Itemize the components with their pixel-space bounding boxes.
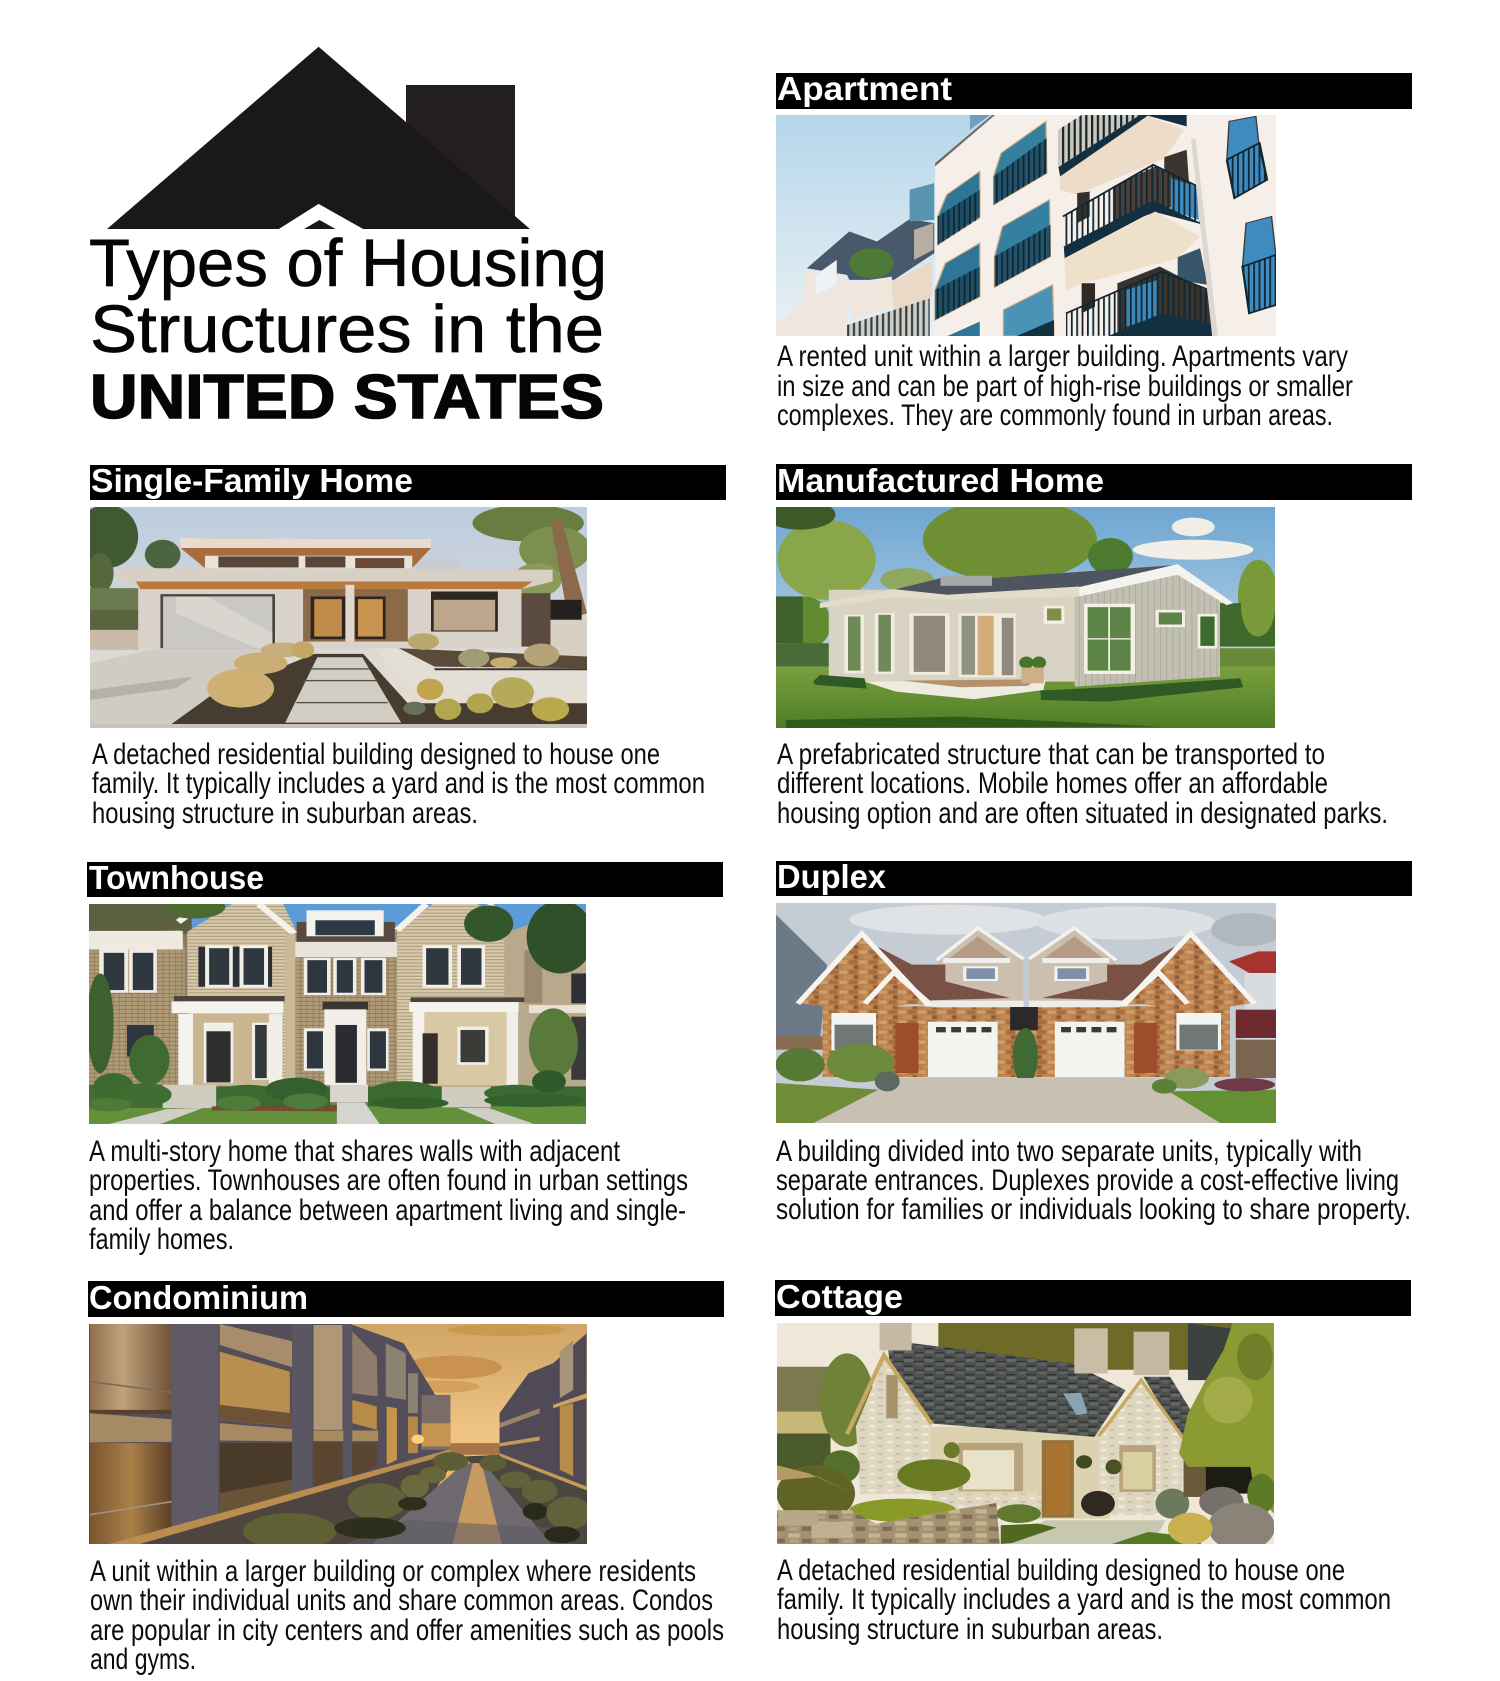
description: apartment: complexes. They are commonly found in urban areas. (777, 399, 1333, 432)
panel: single-family home (76, 462, 726, 830)
description: cottage: housing structure in suburban areas. (777, 1613, 1163, 1646)
photo: brick duplex (776, 903, 1276, 1123)
description: single-family home (92, 738, 705, 830)
description: condominium: are popular in city centers and offer amenities such as pools (90, 1614, 724, 1647)
photo: modern single-family home (90, 507, 587, 728)
heading bar: Condominium (88, 1279, 724, 1317)
title block (89, 47, 607, 432)
description: townhouse: and offer a balance between apartment living and single- (89, 1194, 686, 1227)
description: apartment: A rented unit within a larger building. Apartments vary (777, 340, 1348, 373)
description: condominium: own their individual units and share common areas. Condos (90, 1584, 713, 1617)
heading bar: Single-Family Home (90, 462, 726, 500)
photo: row of townhouses (89, 904, 586, 1124)
photo: apartment building (776, 115, 1276, 336)
photo: stone cottage (777, 1323, 1274, 1544)
panel: townhouse (87, 859, 723, 1256)
heading bar: Townhouse (87, 859, 723, 897)
right windows (1227, 116, 1276, 313)
title: Structures in the: Structures in the (90, 292, 604, 367)
panel: condominium (88, 1279, 724, 1676)
description: townhouse: family homes. (89, 1223, 234, 1256)
photo: manufactured home (776, 507, 1275, 728)
panel: duplex (776, 858, 1412, 1226)
balconies (1058, 115, 1218, 336)
description: manufactured home: different locations. Mobile homes offer an affordable (777, 767, 1328, 800)
description: manufactured home (777, 738, 1388, 830)
description: single-family home: family. It typically includes a yard and is the most common (92, 767, 705, 800)
heading bar: Townhouse: Townhouse (89, 859, 264, 896)
description: apartment (777, 340, 1353, 432)
description: single-family home: housing structure in suburban areas. (92, 797, 478, 830)
description: condominium (90, 1555, 724, 1676)
description: duplex (776, 1135, 1411, 1226)
title: United States: UNITED STATES (90, 363, 604, 432)
heading bar: Apartment: Apartment (777, 70, 952, 107)
title: Types of Housing: Types of Housing (89, 226, 607, 301)
icon: house roof with chimney (107, 47, 530, 229)
heading bar: Duplex (776, 858, 1412, 896)
description: cottage: A detached residential building designed to house one (777, 1554, 1345, 1587)
heading bar: Manufactured Home: Manufactured Home (777, 462, 1104, 499)
heading bar: Condominium: Condominium (89, 1279, 308, 1316)
panel: apartment (776, 70, 1412, 432)
heading bar: Cottage (775, 1278, 1411, 1316)
description: manufactured home: A prefabricated structure that can be transported to (777, 738, 1325, 771)
heading bar: Manufactured Home (776, 462, 1412, 500)
heading bar: Cottage: Cottage (776, 1278, 903, 1315)
description: condominium: A unit within a larger building or complex where residents (90, 1555, 696, 1588)
description: townhouse (89, 1135, 688, 1256)
window column one (935, 171, 980, 336)
description: cottage (777, 1554, 1391, 1646)
panel: manufactured home (764, 462, 1412, 830)
description: duplex: A building divided into two separate units, typically with (776, 1135, 1362, 1168)
heading bar: Single-Family Home: Single-Family Home (91, 462, 413, 499)
description: townhouse: A multi-story home that shares walls with adjacent (89, 1135, 621, 1168)
heading bar: Apartment (776, 70, 1412, 109)
description: single-family home: A detached residential building designed to house one (92, 738, 660, 771)
description: townhouse: properties. Townhouses are often found in urban settings (89, 1164, 688, 1197)
heading bar: Duplex: Duplex (777, 858, 887, 895)
description: condominium: and gyms. (90, 1643, 196, 1676)
window column two (994, 121, 1054, 336)
description: apartment: in size and can be part of high-rise buildings or smaller (777, 370, 1353, 403)
photo: condominium complex at sunset (89, 1324, 587, 1544)
panel: cottage (775, 1278, 1411, 1646)
